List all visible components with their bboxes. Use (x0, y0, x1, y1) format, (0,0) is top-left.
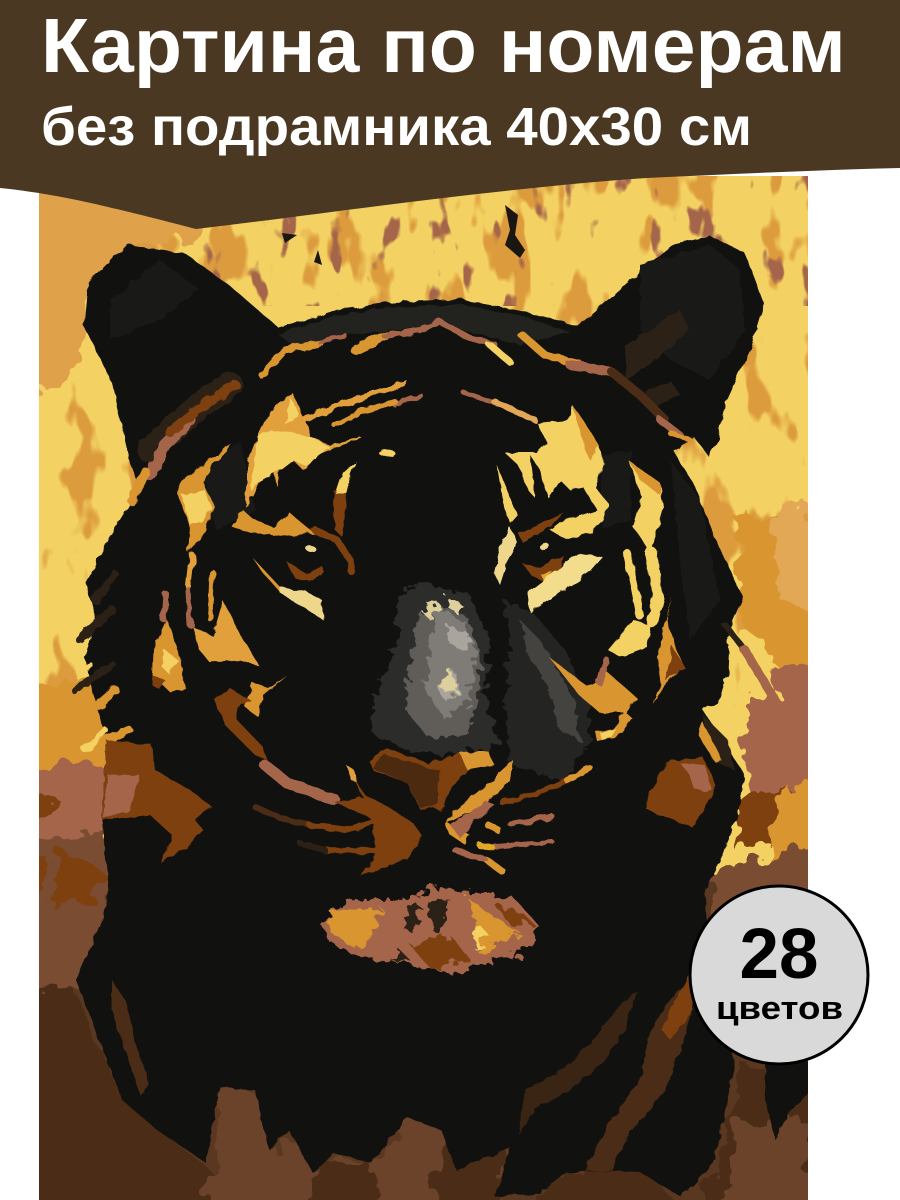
background blotches (20, 170, 830, 1200)
band: left head stripe (132, 322, 690, 500)
cheek orange, left (215, 675, 287, 760)
left edge fur spikes (75, 575, 128, 750)
forehead patch, right (505, 405, 608, 540)
subtle dark-grey fur (279, 304, 570, 350)
inner lower right fur streak (518, 990, 637, 1135)
rust under badge (662, 970, 692, 1040)
subtitle: без подрамника 40х30 см (41, 97, 752, 157)
left whiskers and muzzle (255, 765, 423, 875)
forehead patch, left (245, 380, 407, 507)
nose tip (368, 748, 495, 813)
tiger silhouette (75, 236, 808, 1197)
cheek orange, right (548, 656, 637, 742)
ear fur, right (625, 310, 690, 410)
nose bridge (370, 582, 590, 780)
badge: 28 colours: цветов (716, 990, 843, 1026)
right whiskers and muzzle (445, 760, 590, 872)
left shoulder patch (102, 740, 212, 862)
header banner (0, 0, 900, 229)
right edge fur spikes (725, 625, 775, 715)
side stripes (152, 443, 685, 705)
right cheek patch (647, 715, 735, 828)
lower left fur streak (112, 980, 150, 1095)
eyes and brows (232, 450, 663, 620)
small dark marks above head (282, 205, 525, 265)
chin (323, 887, 540, 973)
badge: 28 colours (690, 886, 868, 1064)
right bottom streak (585, 975, 692, 1170)
badge: 28 colours: 28 (740, 915, 818, 994)
title: Картина по номерам (41, 3, 846, 89)
